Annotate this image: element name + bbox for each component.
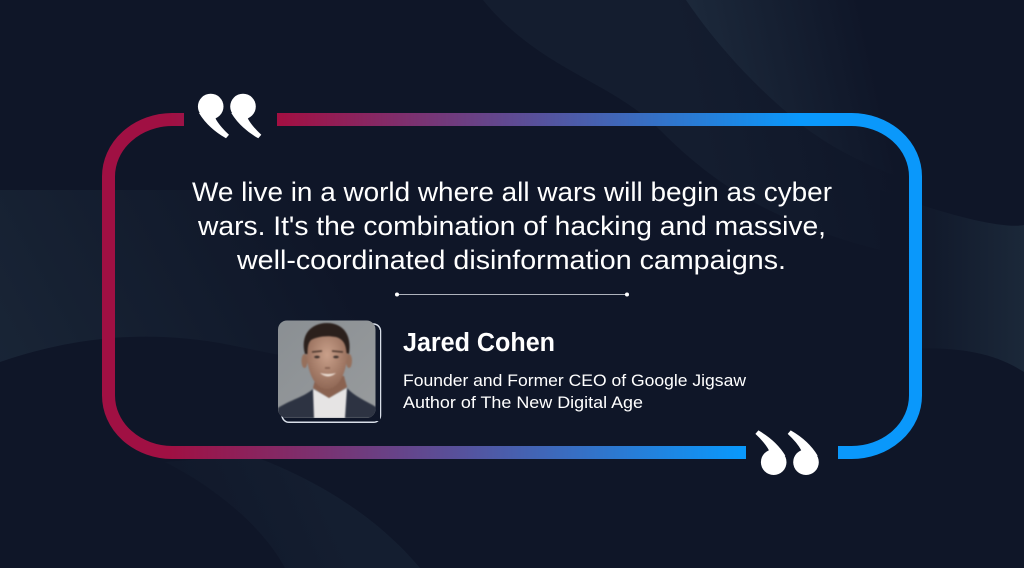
icon: closing quotation mark: [755, 430, 819, 475]
quote text: [192, 177, 832, 275]
portrait: [278, 320, 380, 422]
divider: [395, 292, 629, 296]
speaker title: Author of The New Digital Age: [403, 394, 643, 412]
speaker name: Jared Cohen: [403, 329, 555, 357]
gradient frame: [108, 120, 915, 452]
quote text: wars. It's the combination of hacking and massive,: [197, 211, 826, 241]
speaker title: [403, 372, 746, 412]
speaker title: Founder and Former CEO of Google Jigsaw: [403, 372, 746, 390]
quote text: well-coordinated disinformation campaigns.: [236, 245, 786, 275]
icon: opening quotation mark: [198, 94, 261, 138]
quote text: We live in a world where all wars will begin as cyber: [192, 177, 832, 207]
